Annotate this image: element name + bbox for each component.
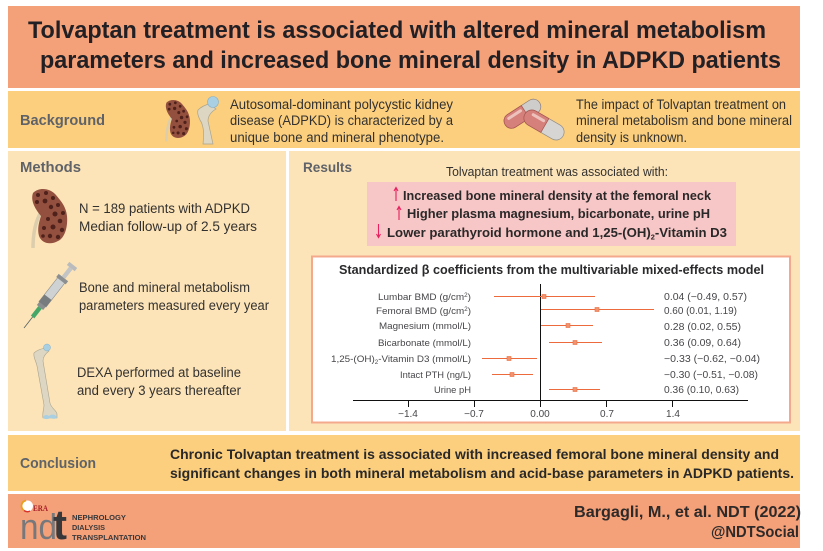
axis tick labels: 1.4 xyxy=(666,409,680,420)
logo: ndt letters: t xyxy=(53,501,67,548)
row: femoral BMD: 2 xyxy=(464,307,468,313)
methods text: measurements: Bone and mineral metabolism xyxy=(79,280,250,295)
panel: conclusion xyxy=(8,435,800,491)
citation xyxy=(574,504,801,541)
panel: footer xyxy=(8,494,801,548)
icon: capsules xyxy=(501,96,567,143)
methods text: DEXA: and every 3 years thereafter xyxy=(77,383,241,398)
axis tick labels: −1.4 xyxy=(398,409,418,420)
row: bicarbonate: 0.36 (0.09, 0.64) xyxy=(664,338,741,349)
row: lumbar BMD: 2 xyxy=(464,293,468,299)
row: magnesium: Magnesium (mmol/L) xyxy=(379,321,471,332)
title heading: parameters and increased bone mineral density in ADPKD patients xyxy=(40,47,781,74)
panel: title xyxy=(8,6,800,88)
conclusion text: Chronic Tolvaptan treatment is associated with increased femoral bone mineral density and xyxy=(170,447,779,462)
row: lumbar BMD: Lumbar BMD (g/cm xyxy=(378,292,460,303)
row: vitamin D3 xyxy=(331,354,760,366)
logo: ERA mark: ERA xyxy=(33,504,48,513)
citation: @NDTSocial xyxy=(711,524,799,541)
logo: journal name: DIALYSIS xyxy=(72,525,105,532)
forest plot chart xyxy=(312,256,790,422)
row: lumbar BMD xyxy=(378,292,747,303)
icon: polycystic kidney small xyxy=(166,100,190,141)
methods text: measurements xyxy=(79,280,269,313)
icon: femur head small xyxy=(198,96,218,144)
row: bicarbonate xyxy=(378,338,741,349)
methods text: cohort: Median follow-up of 2.5 years xyxy=(79,219,257,234)
logo: ndt letters: nd xyxy=(20,506,57,547)
background heading: Background xyxy=(20,112,105,129)
logo: journal name: NEPHROLOGY xyxy=(72,515,126,522)
finding: hormones down: -Vitamin D3 xyxy=(655,226,727,240)
row: magnesium xyxy=(379,321,741,333)
citation: Bargagli, M., et al. NDT (2022) xyxy=(574,504,801,521)
panel: background xyxy=(8,91,800,148)
axis tick labels xyxy=(398,409,680,420)
background text right xyxy=(576,97,792,145)
conclusion heading: Conclusion xyxy=(20,455,96,472)
row: magnesium: 0.28 (0.02, 0.55) xyxy=(664,322,741,333)
key findings box xyxy=(367,182,736,246)
logo: journal name: TRANSPLANTATION xyxy=(72,535,146,542)
icon: polycystic kidney xyxy=(32,189,67,248)
background text left: unique bone and mineral phenotype. xyxy=(230,130,444,145)
row: intact PTH: −0.30 (−0.51, −0.08) xyxy=(664,370,758,381)
row: vitamin D3: −0.33 (−0.62, −0.04) xyxy=(664,354,760,365)
row: bicarbonate: Bicarbonate (mmol/L) xyxy=(378,338,471,349)
chart axes xyxy=(353,284,748,407)
background text right: density is unknown. xyxy=(576,130,687,145)
icon: femur xyxy=(34,344,57,419)
finding: bone density up: Increased bone mineral density at the femoral neck xyxy=(403,189,711,203)
conclusion text xyxy=(170,447,794,481)
row: femoral BMD: 0.60 (0.01, 1.19) xyxy=(664,306,737,317)
row: lumbar BMD: 0.04 (−0.49, 0.57) xyxy=(664,292,747,303)
panel: results xyxy=(289,151,800,431)
background text left: Autosomal-dominant polycystic kidney xyxy=(230,97,453,112)
row: urine pH: Urine pH xyxy=(434,385,471,396)
methods text: cohort: N = 189 patients with ADPKD xyxy=(79,201,250,216)
title heading: Tolvaptan treatment is associated with altered mineral metabolism xyxy=(28,17,766,44)
row: urine pH xyxy=(434,385,739,396)
row: vitamin D3: -Vitamin D3 (mmol/L) xyxy=(378,354,471,365)
methods text: measurements: parameters measured every year xyxy=(79,298,269,313)
row: vitamin D3: 1,25-(OH) xyxy=(331,354,373,365)
finding: hormones down: 2 xyxy=(651,234,655,242)
results heading: Results xyxy=(303,159,352,175)
row: intact PTH xyxy=(400,370,758,381)
background text left: disease (ADPKD) is characterized by a xyxy=(230,113,453,128)
row: femoral BMD: ) xyxy=(468,306,471,317)
panel: methods xyxy=(8,151,286,431)
row: intact PTH: Intact PTH (ng/L) xyxy=(400,370,471,381)
background text right: mineral metabolism and bone mineral xyxy=(576,113,792,128)
conclusion text: significant changes in both mineral metabolism and acid-base parameters in ADPKD patients. xyxy=(170,466,794,481)
icon: syringe xyxy=(19,261,78,332)
methods text: DEXA: DEXA performed at baseline xyxy=(77,365,241,380)
title heading xyxy=(28,17,781,74)
row: femoral BMD xyxy=(376,306,737,317)
finding: hormones down xyxy=(376,224,727,242)
results intro: Tolvaptan treatment was associated with: xyxy=(446,165,668,179)
methods text: cohort xyxy=(79,201,257,234)
row: vitamin D3: 2 xyxy=(375,360,379,366)
row: femoral BMD: Femoral BMD (g/cm xyxy=(376,306,461,317)
row: lumbar BMD: ) xyxy=(468,292,471,303)
finding: hormones down: Lower parathyroid hormone and 1,25-(OH) xyxy=(387,226,638,240)
axis tick labels: 0.7 xyxy=(600,409,614,420)
axis tick labels: −0.7 xyxy=(464,409,484,420)
row: urine pH: 0.36 (0.10, 0.63) xyxy=(664,385,739,396)
methods text: DEXA xyxy=(77,365,241,398)
logo: ERA and ndt xyxy=(20,500,146,548)
methods heading: Methods xyxy=(20,159,81,176)
logo: journal name xyxy=(72,515,146,542)
axis tick labels: 0.00 xyxy=(530,409,550,420)
chart title: Standardized β coefficients from the multivariable mixed-effects model xyxy=(339,262,764,277)
background text right: The impact of Tolvaptan treatment on xyxy=(576,97,786,112)
background text left xyxy=(230,97,453,145)
finding: plasma values up: Higher plasma magnesium, bicarbonate, urine pH xyxy=(407,207,710,221)
